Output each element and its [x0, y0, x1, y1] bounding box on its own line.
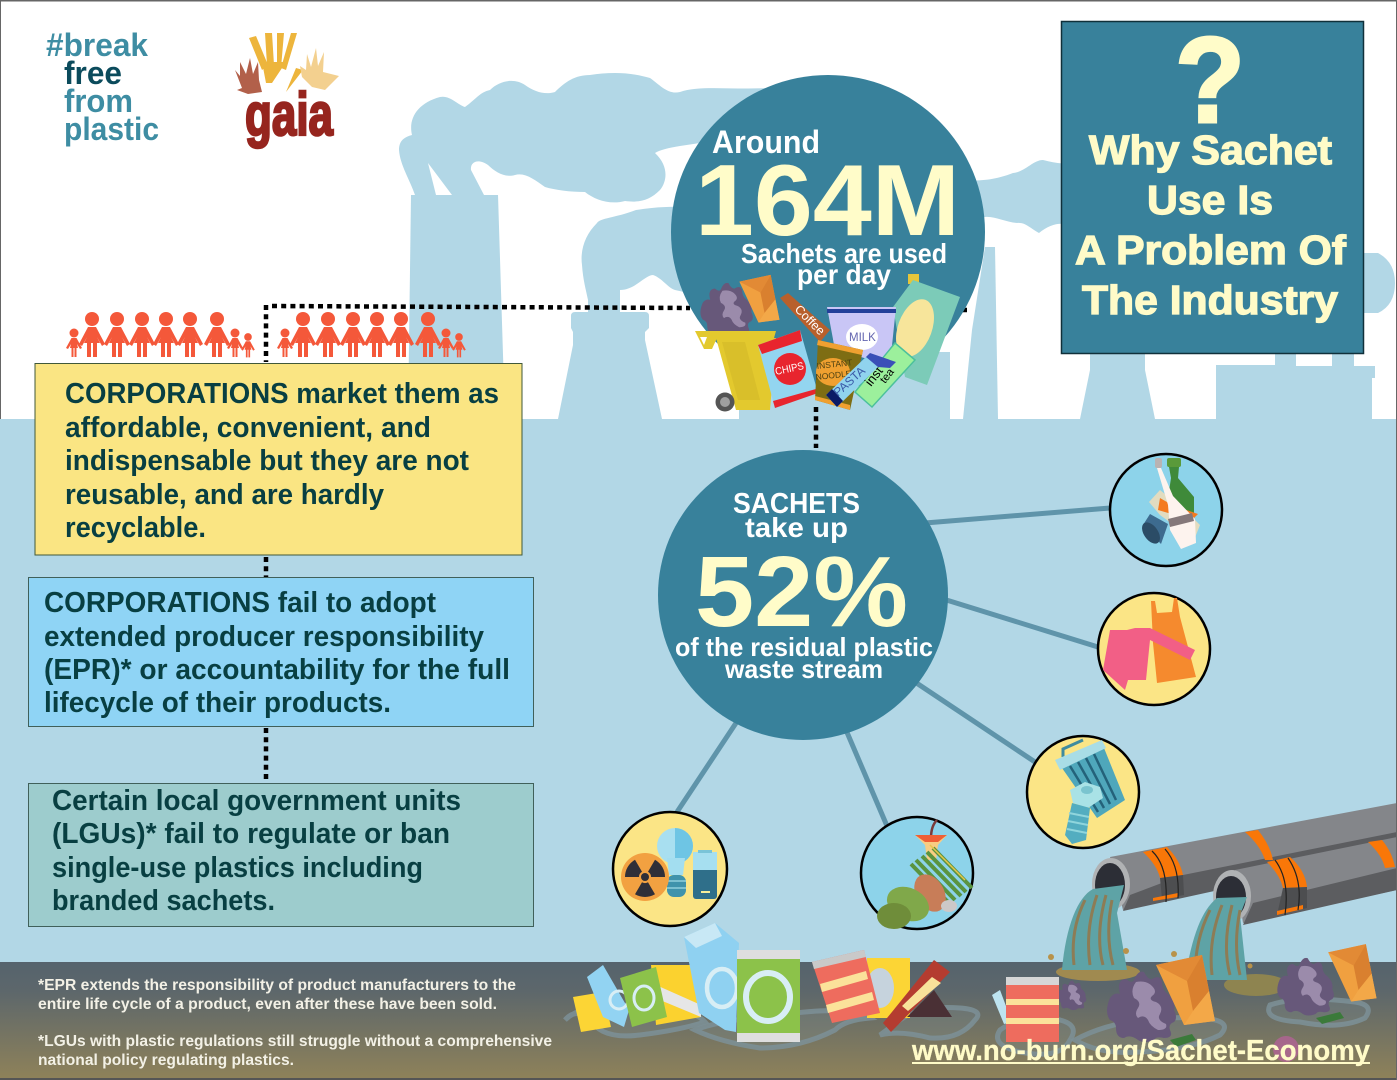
panel: local government units: single-use plastics including [52, 852, 423, 884]
footnotes [38, 977, 552, 1069]
footnotes: entire life cycle of a product, even after these have been sold. [38, 996, 497, 1013]
sachet and trash bin illustration [695, 274, 960, 412]
title text [1075, 127, 1346, 323]
instant tea sachet: inst [862, 363, 886, 389]
spokes [677, 508, 1110, 826]
icon: clothes [1098, 593, 1210, 705]
sachet litter, centre group [812, 950, 1086, 1042]
question mark: ? [1175, 12, 1245, 148]
icon: residual metal bin and bolt [1027, 736, 1139, 848]
gray puddles [565, 999, 1368, 1054]
logo: gaia: gaia [245, 81, 333, 148]
icon: bottles and glass waste [1110, 454, 1222, 566]
panel: corporations market: reusable, and are hardly [65, 479, 384, 511]
instant noodles sachet: NOODLE [815, 368, 852, 382]
logo: break free from plastic: plastic [64, 111, 159, 147]
panel: corporations market: recyclable. [65, 512, 206, 544]
stat circle: 52% [658, 450, 1110, 826]
stat circle: 164M [671, 75, 985, 389]
panel: corporations fail EPR: extended producer responsibility [44, 621, 484, 653]
panel: corporations fail EPR: lifecycle of their products. [44, 687, 391, 719]
panel: corporations market: CORPORATIONS market them as [65, 378, 499, 410]
footnotes: national policy regulating plastics. [38, 1052, 294, 1069]
logo: break free from plastic [46, 27, 159, 147]
logo: break free from plastic: free [64, 55, 122, 91]
pipes [1048, 803, 1397, 996]
pasta sachet [826, 353, 896, 407]
instant tea sachet: tea [878, 366, 897, 386]
logo: gaia [235, 33, 339, 148]
panel: corporations market: affordable, convenient, and [65, 412, 431, 444]
instant tea sachet [855, 343, 915, 407]
footnotes: *LGUs with plastic regulations still struggle without a comprehensive [38, 1033, 552, 1050]
panel: corporations fail EPR: (EPR)* or accountability for the full [44, 654, 510, 686]
trash bag [700, 283, 753, 336]
milk sachet: MILK [849, 332, 876, 344]
milk sachet [827, 307, 896, 365]
stat circle: 164M: per day [797, 259, 891, 290]
panel: corporations market [35, 364, 522, 555]
stat circle: 52%: take up [745, 512, 848, 543]
coffee stick [780, 293, 830, 342]
orange box [739, 275, 779, 322]
panel: local government units [28, 784, 534, 926]
polluted water [1048, 885, 1288, 996]
panel: corporations fail EPR [28, 578, 534, 726]
website link: www.no-burn.org/Sachet-Economy [911, 1035, 1370, 1067]
panel: corporations market: indispensable but they are not [65, 445, 469, 477]
bin [695, 331, 776, 412]
green pouch [889, 274, 960, 385]
panel: local government units: (LGUs)* fail to regulate or ban [52, 818, 450, 850]
title text: Use Is [1147, 177, 1273, 223]
pipe one [1092, 803, 1397, 911]
panel: local government units: Certain local government units [52, 785, 461, 817]
stat circle: 164M: Sachets are used [741, 238, 947, 269]
logo: break free from plastic: #break [46, 27, 148, 63]
sachet litter, left group [573, 923, 800, 1042]
title text: A Problem Of [1075, 227, 1346, 273]
icon: food waste [861, 817, 973, 929]
coffee stick: Coffee [792, 302, 828, 338]
people row [66, 312, 466, 357]
chips sachet [758, 330, 818, 408]
panel: local government units: branded sachets. [52, 885, 275, 917]
logo: break free from plastic: from [64, 83, 133, 119]
stat circle: 52%: of the residual plastic [675, 632, 933, 662]
title box [1062, 12, 1364, 354]
stat circle: 52%: waste stream [724, 654, 883, 684]
ground band [0, 962, 1397, 1080]
icon: bulb, battery, hazardous waste [613, 812, 727, 926]
stat circle: 164M: Around [712, 124, 820, 160]
instant noodles sachet: INSTANT [816, 357, 853, 371]
pasta sachet: PASTA [831, 364, 868, 399]
trash bags with boxes, right [1107, 944, 1377, 1062]
title text: Why Sachet [1089, 127, 1332, 173]
chips sachet: CHIPS [774, 360, 805, 378]
connector: dotted lines [266, 305, 968, 780]
stat circle: 52%: SACHETS [733, 488, 860, 520]
stat circle: 52%: 52% [695, 536, 908, 648]
panel: corporations fail EPR: CORPORATIONS fail to adopt [44, 587, 436, 619]
pipe two [1213, 837, 1397, 925]
stat circle: 164M: 164M [695, 145, 960, 257]
instant noodles sachet [815, 340, 863, 410]
title text: The Industry [1082, 277, 1338, 323]
footnotes: *EPR extends the responsibility of product manufacturers to the [38, 977, 516, 994]
